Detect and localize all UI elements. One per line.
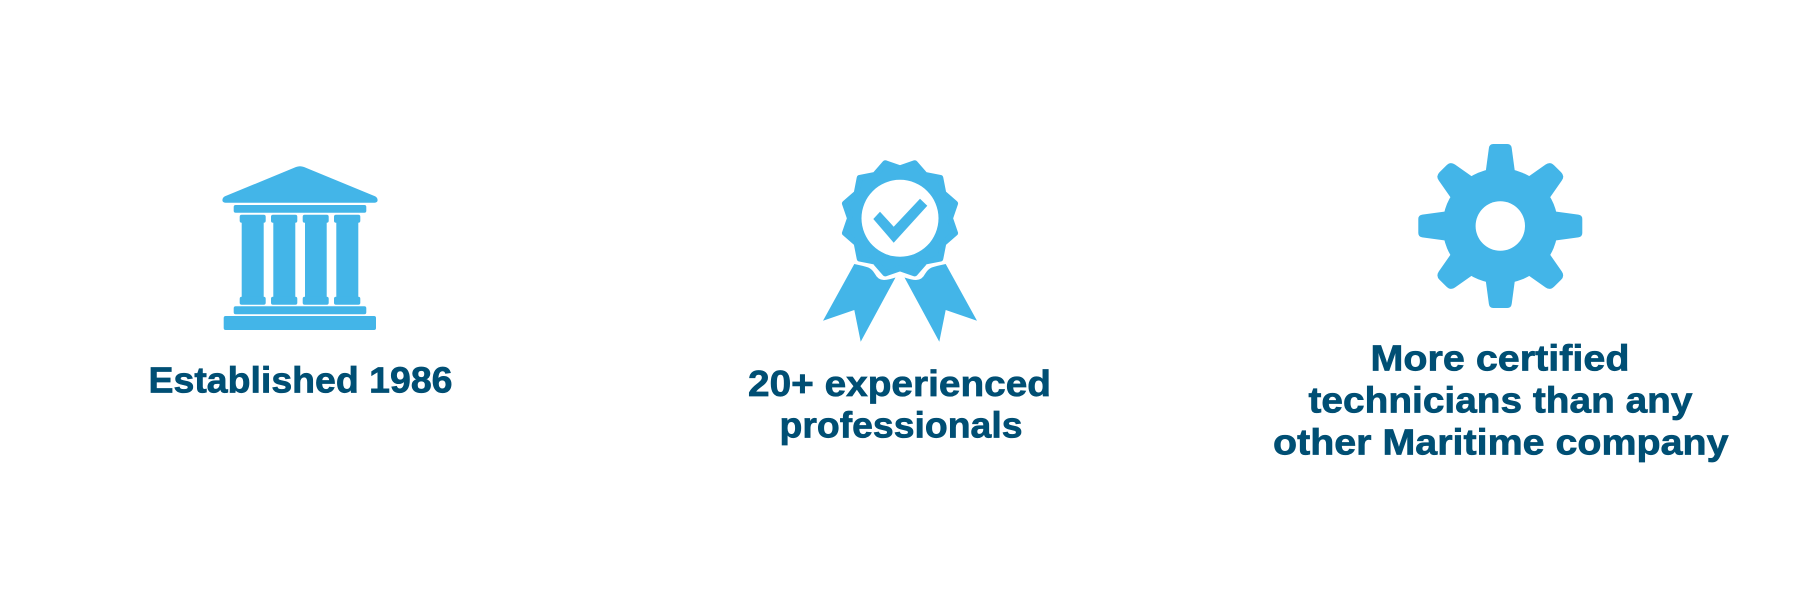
check mark: [873, 199, 927, 243]
icon: classical building: [222, 166, 378, 330]
left ribbon: [823, 264, 896, 342]
icon: award rosette: [823, 163, 977, 342]
label: 20+ experienced professionals: [748, 363, 1051, 446]
label: 20+ experienced professionals: professionals: [780, 405, 1022, 446]
label: more certified technicians: More certified: [1370, 338, 1630, 379]
white disc: [862, 180, 938, 257]
panel: established: [148, 166, 452, 401]
label: 20+ experienced professionals: 20+ experienced: [748, 363, 1051, 404]
rosette scalloped seal: [845, 163, 955, 273]
label: more certified technicians: other Maritime company: [1273, 421, 1728, 462]
panel: technicians: [1273, 144, 1728, 462]
right ribbon: [904, 264, 977, 342]
panel: professionals: [748, 163, 1051, 446]
icon: gear: [1418, 144, 1582, 308]
label: more certified technicians: technicians than any: [1308, 380, 1692, 421]
label: more certified technicians: [1273, 338, 1728, 462]
label: established 1986: Established 1986: [148, 360, 452, 401]
